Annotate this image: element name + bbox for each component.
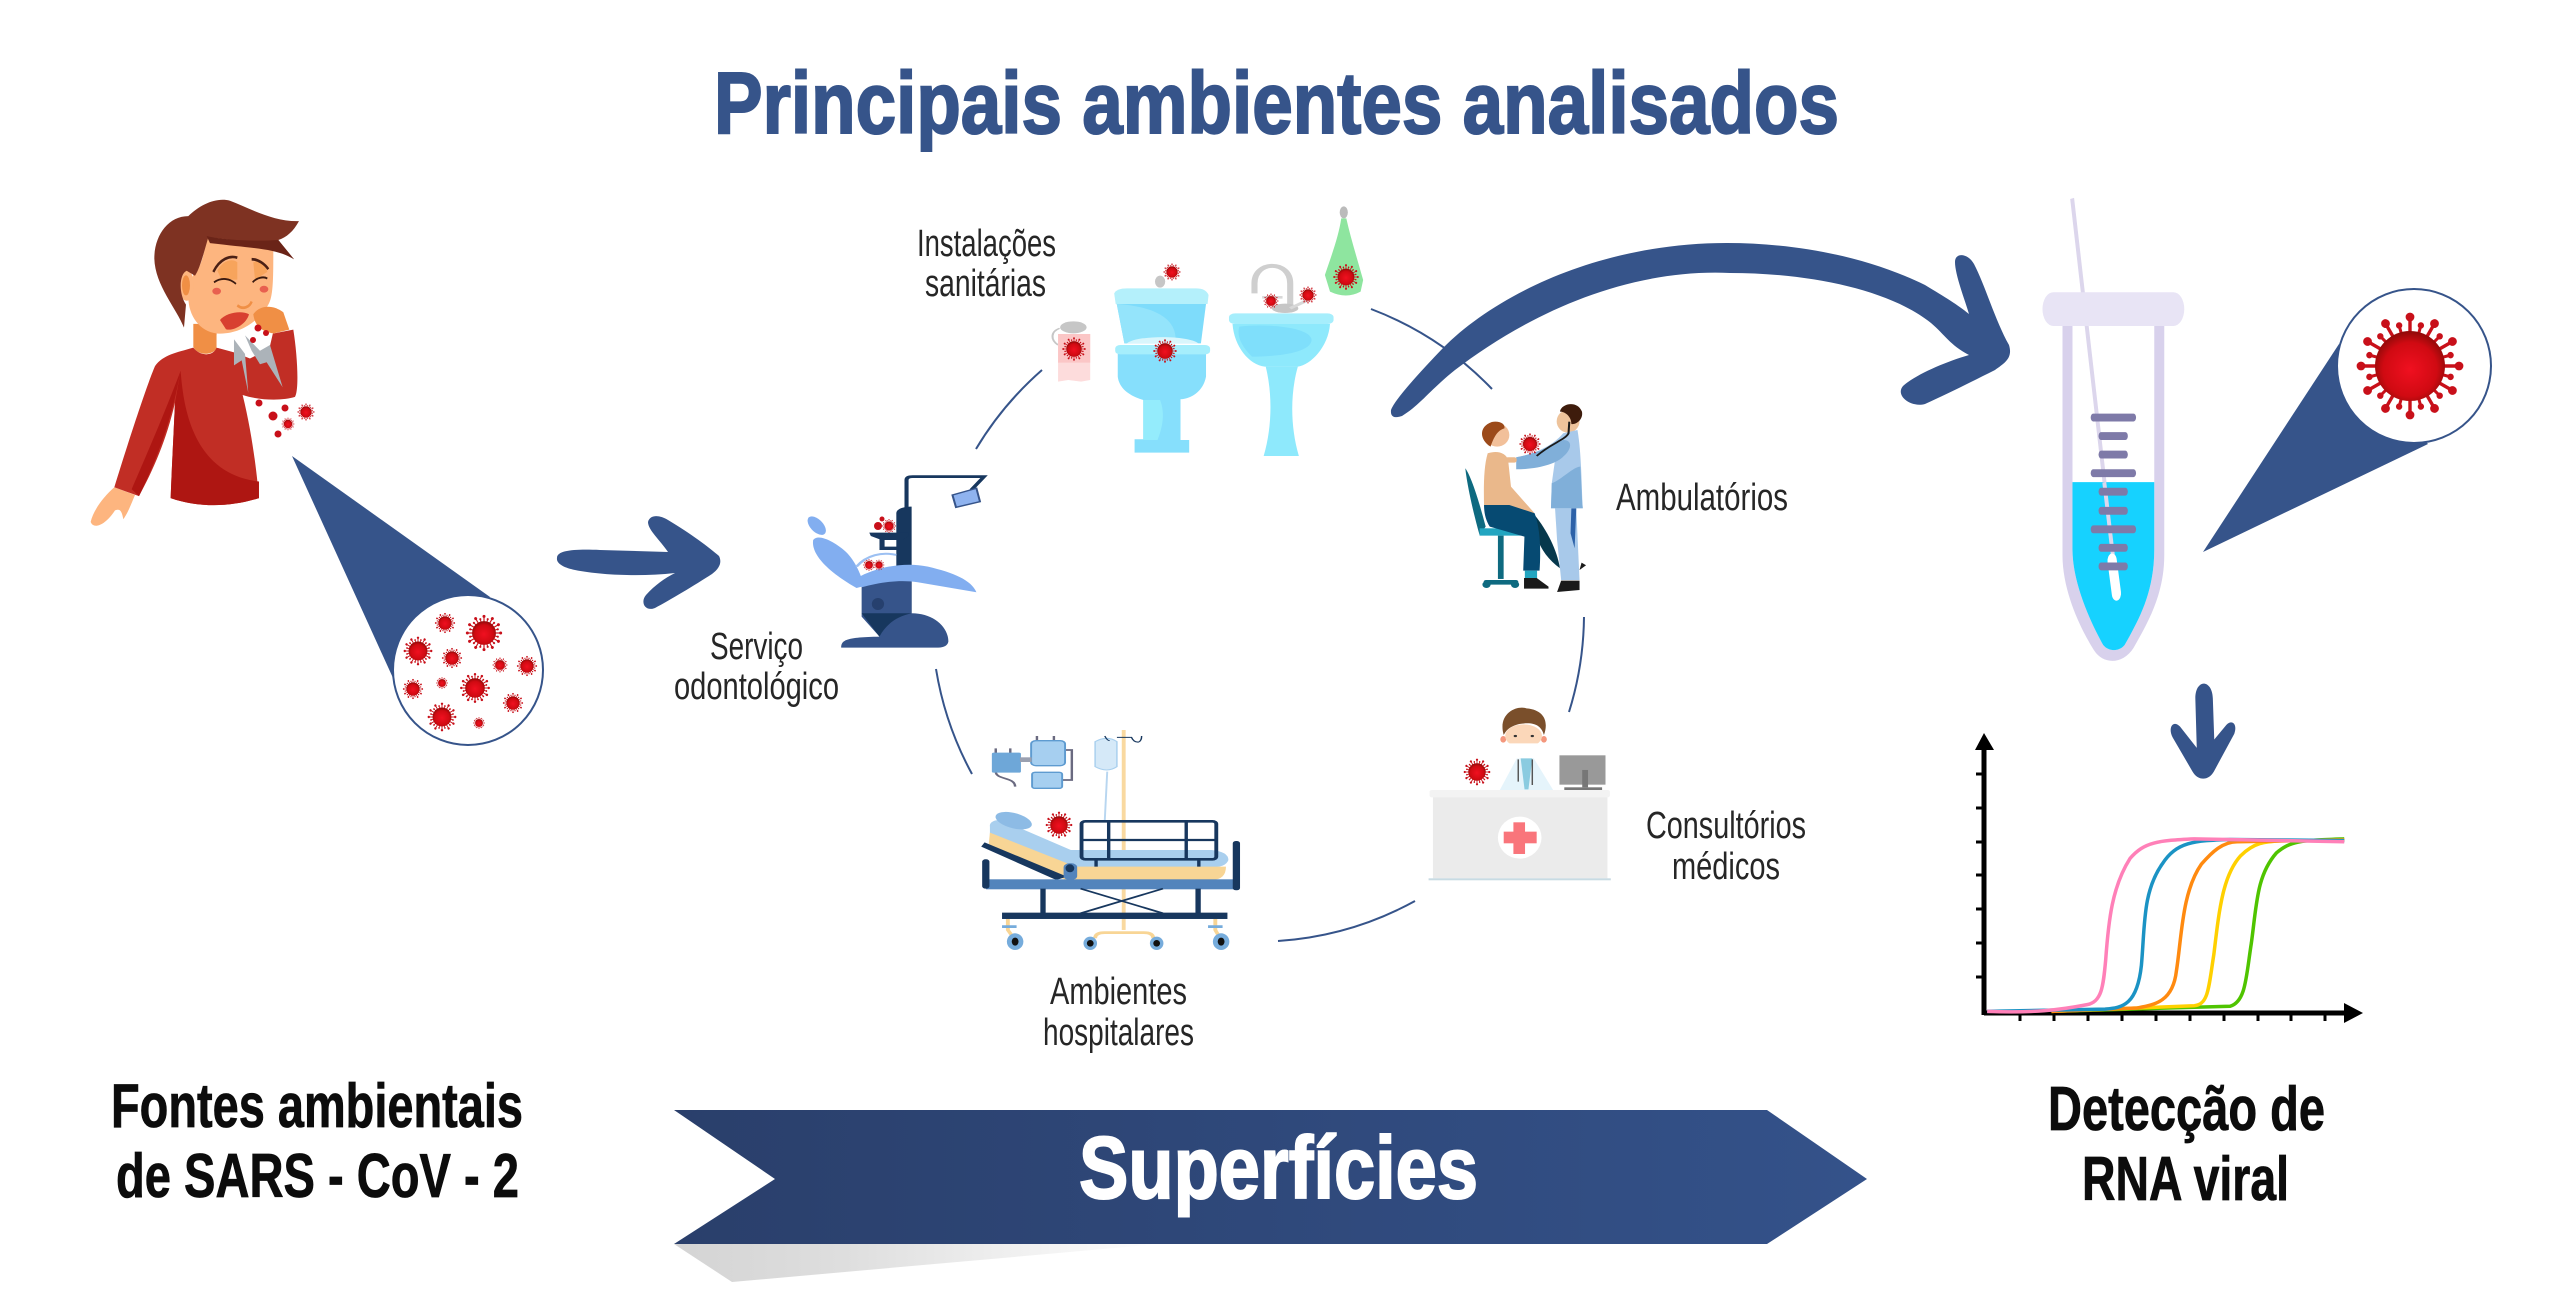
panel: environments cycle [674,206,1806,1054]
chart: amplification curves [1975,733,2363,1023]
label: dental [674,626,839,708]
heading: source label: Fontes ambientais [111,1072,523,1141]
heading: detection label [2048,1075,2325,1214]
title: Principais ambientes analisados [714,55,1839,152]
label: outpatient: Ambulatórios [1616,477,1788,519]
label: sanitary [917,223,1056,305]
icon: dental chair [804,477,984,648]
heading: detection label: Detecção de [2048,1075,2325,1144]
banner: Superfícies [674,1110,1867,1282]
icon: cough droplets [250,324,315,438]
panel: environmental source [91,200,543,1211]
label: medical offices: Consultórios [1646,805,1806,847]
panel: detection [1975,198,2491,1214]
heading: source label: de SARS - CoV - 2 [116,1142,519,1211]
banner: Superfícies: Superfícies [1079,1118,1478,1217]
icon: medical office desk [1429,708,1611,880]
label: sanitary: sanitárias [925,263,1046,305]
label: sanitary: Instalações [917,223,1056,265]
callout: magnified virus particles [292,456,543,745]
icon: doctor examining patient [1465,404,1586,592]
label: dental: odontológico [674,666,839,708]
arrow: tube to chart [2171,684,2235,779]
arrow: environments to detection [1391,243,2010,417]
arrow: source to environments [557,516,720,609]
label: hospital: Ambientes [1050,971,1187,1013]
connecting arcs [936,309,1584,941]
icon: hospital bed [981,730,1240,950]
callout: magnified virus [2203,289,2491,552]
label: dental: Serviço [710,626,803,668]
icon: test tube with swab [2042,198,2184,661]
label: hospital [1043,971,1194,1054]
icon: sanitary fixtures [1052,206,1363,456]
heading: source label [111,1072,523,1211]
illustration: coughing person [91,200,299,526]
label: medical offices [1646,805,1806,888]
heading: detection label: RNA viral [2082,1145,2289,1214]
label: medical offices: médicos [1672,846,1780,888]
label: hospital: hospitalares [1043,1012,1194,1054]
